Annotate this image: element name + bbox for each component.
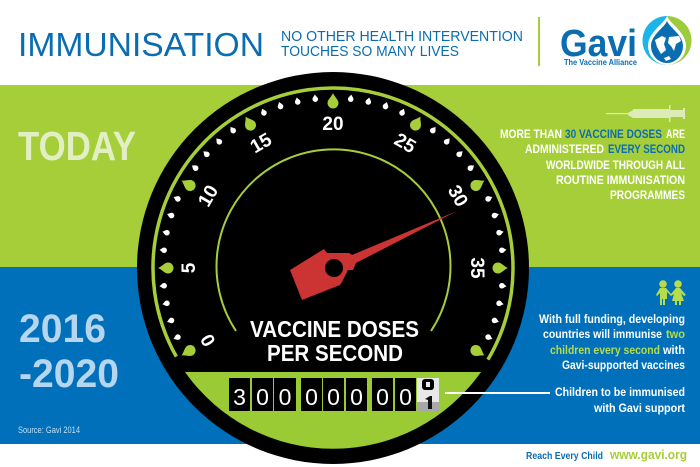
odometer counter xyxy=(229,378,439,411)
counter leader line xyxy=(445,392,550,394)
gauge scale numbers: 30 xyxy=(443,182,472,211)
gauge scale numbers: 0 xyxy=(197,330,220,350)
text: today description: EVERY SECOND xyxy=(608,142,685,156)
odometer counter: 0 xyxy=(399,384,412,410)
text: counter caption xyxy=(555,385,685,415)
gauge inner arc xyxy=(217,149,450,331)
gauge scale numbers xyxy=(179,114,487,350)
gauge tick marks xyxy=(158,93,508,360)
text: counter caption: Children to be immunised xyxy=(555,385,685,399)
text: today description xyxy=(500,127,685,202)
text: today description: 30 VACCINE DOSES xyxy=(565,127,662,141)
text: 2016-2020 description xyxy=(539,312,685,372)
text: today description: ROUTINE IMMUNISATION xyxy=(556,173,685,187)
subtitle xyxy=(281,28,523,60)
odometer counter: 0 xyxy=(376,384,389,410)
heading: 2016-2020: 2016 xyxy=(19,307,106,351)
gauge scale numbers: 25 xyxy=(390,129,420,158)
text: 2016-2020 description: two xyxy=(666,327,685,341)
text: counter caption: with Gavi support xyxy=(593,401,685,415)
panel: today background xyxy=(0,85,700,267)
text: today description: ARE xyxy=(666,127,685,141)
text: 2016-2020 description: with xyxy=(662,343,685,357)
footer: Reach Every Child xyxy=(526,451,603,462)
heading: 2016-2020 xyxy=(19,307,119,396)
odometer counter: 0 xyxy=(350,384,363,410)
gauge scale numbers: 20 xyxy=(322,114,344,135)
source note: Source: Gavi 2014 xyxy=(18,425,80,435)
gauge scale numbers: 5 xyxy=(179,262,200,273)
odometer counter: 0 xyxy=(279,384,291,410)
gauge lower green panel xyxy=(185,372,481,449)
logo: Gavi xyxy=(560,16,692,67)
text: 2016-2020 description: children every second xyxy=(550,343,660,357)
text: today description: PROGRAMMES xyxy=(610,188,685,202)
panel: 2016-2020 background xyxy=(0,267,700,444)
subtitle: NO OTHER HEALTH INTERVENTION xyxy=(281,28,523,45)
gauge scale numbers: 35 xyxy=(466,257,487,279)
text: today description: MORE THAN xyxy=(500,127,562,141)
gauge label: VACCINE DOSES xyxy=(250,316,419,342)
header divider xyxy=(538,17,540,66)
footer: www.gavi.org xyxy=(609,447,687,462)
icon: two children xyxy=(656,280,686,305)
odometer counter: 0 xyxy=(256,384,269,410)
gauge xyxy=(88,23,578,467)
logo: Gavi: Gavi xyxy=(560,23,637,65)
icon: syringe xyxy=(606,105,685,122)
gauge label xyxy=(250,316,419,366)
text: 2016-2020 description: With full funding, developing xyxy=(539,312,685,326)
gauge label: PER SECOND xyxy=(267,340,403,366)
gauge needle xyxy=(290,211,457,300)
odometer counter: 0 xyxy=(305,384,318,410)
gauge scale numbers: 15 xyxy=(247,129,276,158)
odometer counter: 3 xyxy=(233,384,246,410)
logo: Gavi: The Vaccine Alliance xyxy=(564,58,638,67)
gauge scale numbers: 10 xyxy=(194,182,223,211)
text: today description: ADMINISTERED xyxy=(525,142,604,156)
heading: 2016-2020: -2020 xyxy=(19,352,119,396)
title: IMMUNISATION xyxy=(18,26,264,63)
subtitle: TOUCHES SO MANY LIVES xyxy=(281,43,459,60)
odometer counter: 0 xyxy=(327,384,340,410)
footer xyxy=(526,447,687,462)
text: 2016-2020 description: countries will immunise xyxy=(543,327,662,341)
heading: today: TODAY xyxy=(18,123,136,169)
